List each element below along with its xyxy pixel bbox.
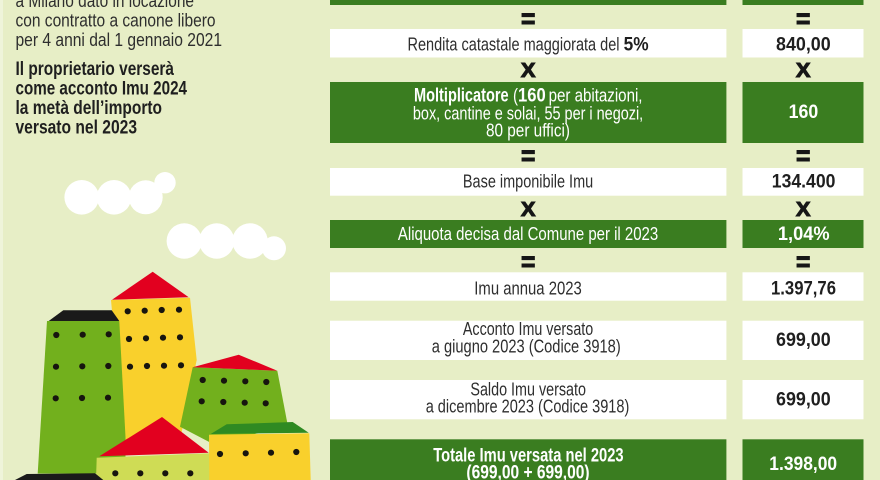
row: rendita maggiorata: Rendita catastale maggiorata del xyxy=(408,34,620,55)
row: base imponibile xyxy=(330,168,726,196)
row: moltiplicatore: 160 xyxy=(518,85,546,107)
value: 1,04%: 1,04% xyxy=(778,223,830,245)
row: totale: Totale Imu versata nel 2023 xyxy=(433,444,624,466)
value: 134.400 xyxy=(742,168,864,196)
row: aliquota: Aliquota decisa dal Comune per il 2023 xyxy=(398,223,658,244)
table: right column xyxy=(742,0,864,480)
operator: times: X xyxy=(521,199,536,221)
row: saldo: Saldo Imu versato xyxy=(470,378,586,399)
building: yellow house xyxy=(209,422,311,480)
bold statement text: versato nel 2023 xyxy=(16,116,137,138)
operator: equals: = xyxy=(796,3,810,34)
value: 1.397,76: 1.397,76 xyxy=(771,277,836,299)
table: left column xyxy=(330,0,726,480)
value: 134.400: 134.400 xyxy=(772,171,836,193)
row: acconto: Acconto Imu versato xyxy=(463,318,593,339)
bold statement text xyxy=(16,58,187,138)
operator: times: X xyxy=(796,199,811,221)
icon: cloud 1 xyxy=(64,172,176,215)
building: yellow tower xyxy=(111,272,197,455)
intro text: con contratto a canone libero xyxy=(16,10,216,30)
icon: cloud 2 xyxy=(167,223,286,260)
value: saldo 699,00 xyxy=(742,380,864,419)
bold statement text: come acconto Imu 2024 xyxy=(16,78,187,100)
operator: equals: = xyxy=(521,3,535,34)
row: moltiplicatore: per abitazioni, xyxy=(549,85,642,106)
value: 1,04% xyxy=(742,220,864,248)
row: moltiplicatore: Moltiplicatore xyxy=(414,85,509,107)
intro text: per 4 anni dal 1 gennaio 2021 xyxy=(16,29,222,50)
row: imu annua xyxy=(330,272,726,301)
building: light green house xyxy=(96,417,210,480)
building: black roof xyxy=(15,473,103,480)
value: 840,00: 840,00 xyxy=(776,34,831,56)
row: rendita maggiorata xyxy=(330,29,726,58)
value: acconto 699,00: 699,00 xyxy=(776,329,831,351)
row: moltiplicatore: 80 per uffici) xyxy=(486,120,570,141)
value: 160 xyxy=(742,82,864,143)
row: top bar label xyxy=(330,0,726,5)
operator: equals: = xyxy=(796,140,810,171)
row: base imponibile: Base imponibile Imu xyxy=(463,171,593,192)
operator: equals: = xyxy=(796,246,810,277)
value: totale 1.398,00 xyxy=(742,439,864,480)
operator: equals: = xyxy=(521,246,535,277)
value: 160: 160 xyxy=(789,101,818,123)
bold statement text: la metà dell’importo xyxy=(16,97,162,119)
row: acconto xyxy=(330,318,726,360)
value: totale 1.398,00: 1.398,00 xyxy=(769,453,837,475)
intro text xyxy=(16,0,222,50)
illustration: buildings xyxy=(15,272,311,480)
bold statement text: Il proprietario verserà xyxy=(16,58,174,80)
row: aliquota xyxy=(330,220,726,248)
row: rendita maggiorata: 5% xyxy=(624,34,649,56)
row: totale xyxy=(330,439,726,480)
operator: times: X xyxy=(796,60,811,82)
operator: times: X xyxy=(521,60,536,82)
row: saldo xyxy=(330,378,726,419)
value: acconto 699,00 xyxy=(742,321,864,360)
row: acconto: a giugno 2023 (Codice 3918) xyxy=(432,336,621,357)
building: green middle xyxy=(180,355,288,445)
row: imu annua: Imu annua 2023 xyxy=(474,277,582,298)
operator: equals: = xyxy=(521,140,535,171)
value: top bar xyxy=(742,0,864,5)
row: saldo: a dicembre 2023 (Codice 3918) xyxy=(426,396,629,417)
row: moltiplicatore: box, cantine e solai, 55 per i negozi, xyxy=(413,102,643,123)
value: saldo 699,00: 699,00 xyxy=(776,388,831,410)
building: green tower xyxy=(38,310,126,474)
row: moltiplicatore xyxy=(330,82,726,143)
value: 840,00 xyxy=(742,29,864,58)
row: moltiplicatore: ( xyxy=(513,85,519,106)
value: 1.397,76 xyxy=(742,272,864,301)
